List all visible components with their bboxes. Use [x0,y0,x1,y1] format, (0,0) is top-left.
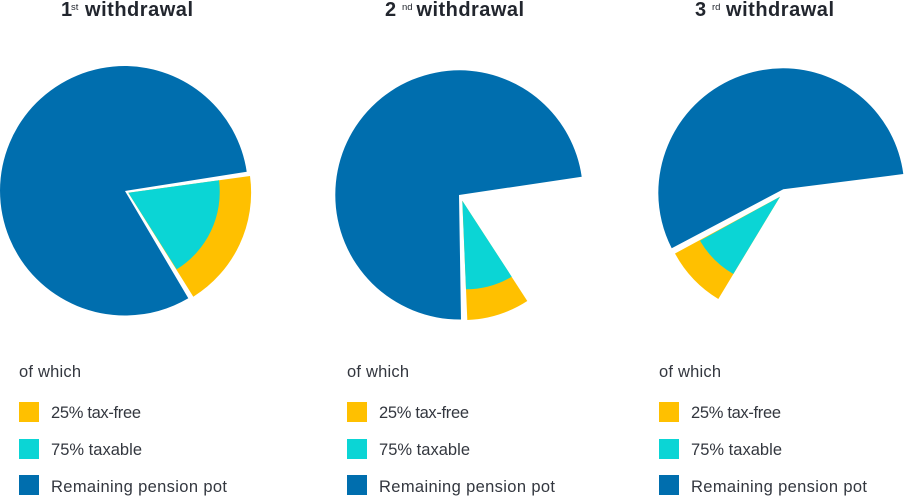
legend: 3rd withdrawal [659,363,867,496]
legend: 2nd withdrawal: of which [347,363,409,381]
legend: 2nd withdrawal: 75% taxable [379,441,470,459]
pie chart: 2nd withdrawal [335,70,582,320]
slice: 75% taxable [700,197,780,274]
legend: 3rd withdrawal: 25% tax-free [691,404,781,422]
legend: 1st withdrawal: 25% tax-free [51,404,141,422]
heading: 2nd withdrawal: nd [402,2,413,13]
legend: 3rd withdrawal: 75% taxable [691,441,782,459]
heading: 3rd withdrawal: rd [712,2,720,13]
slice: 25% tax-free [128,176,251,297]
legend: 2nd withdrawal [347,363,555,496]
panel: 2nd withdrawal [335,0,582,496]
panel: 3rd withdrawal [658,0,903,496]
heading: 1st withdrawal: st [71,2,79,13]
legend: 1st withdrawal: of which [19,363,81,381]
legend: 3rd withdrawal: of which [659,363,721,381]
slice: remaining pension pot [658,68,903,248]
pie chart: 3rd withdrawal [658,68,903,299]
panel: 1st withdrawal [0,0,251,496]
legend: 2nd withdrawal: 25% tax-free [379,404,469,422]
slice: remaining pension pot [0,66,247,316]
slice: 75% taxable [128,180,220,269]
legend: 1st withdrawal: Remaining pension pot [51,478,227,496]
slice: 25% tax-free [462,201,527,320]
legend: 3rd withdrawal: Remaining pension pot [691,478,867,496]
legend: 1st withdrawal: 75% taxable [51,441,142,459]
legend: 1st withdrawal [19,363,227,496]
slice: remaining pension pot [335,70,582,320]
slice: 25% tax-free [675,197,780,299]
legend: 2nd withdrawal: Remaining pension pot [379,478,555,496]
slice: 75% taxable [462,201,512,289]
pie chart: 1st withdrawal [0,66,251,316]
